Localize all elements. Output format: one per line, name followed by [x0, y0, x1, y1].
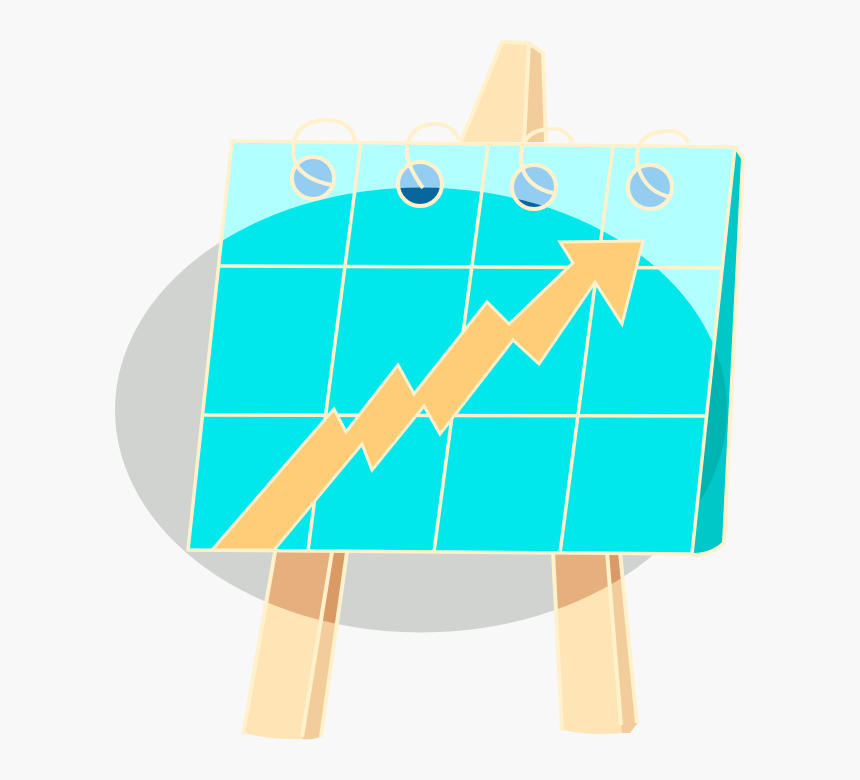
ring 1 [292, 120, 355, 199]
ring 4 [628, 131, 689, 209]
rising arrow [212, 241, 643, 550]
board front [188, 141, 735, 554]
lower board fill [188, 415, 706, 554]
binding rings [292, 120, 689, 209]
grid lines [188, 141, 735, 554]
back leg of easel [461, 42, 546, 142]
right front leg [553, 552, 637, 734]
left front leg [243, 552, 347, 739]
gray ellipse backdrop [115, 188, 727, 632]
ring 3 [512, 129, 573, 209]
board side panel [692, 146, 743, 555]
easel with chart board illustration [115, 40, 745, 740]
ring 2 [398, 124, 459, 206]
